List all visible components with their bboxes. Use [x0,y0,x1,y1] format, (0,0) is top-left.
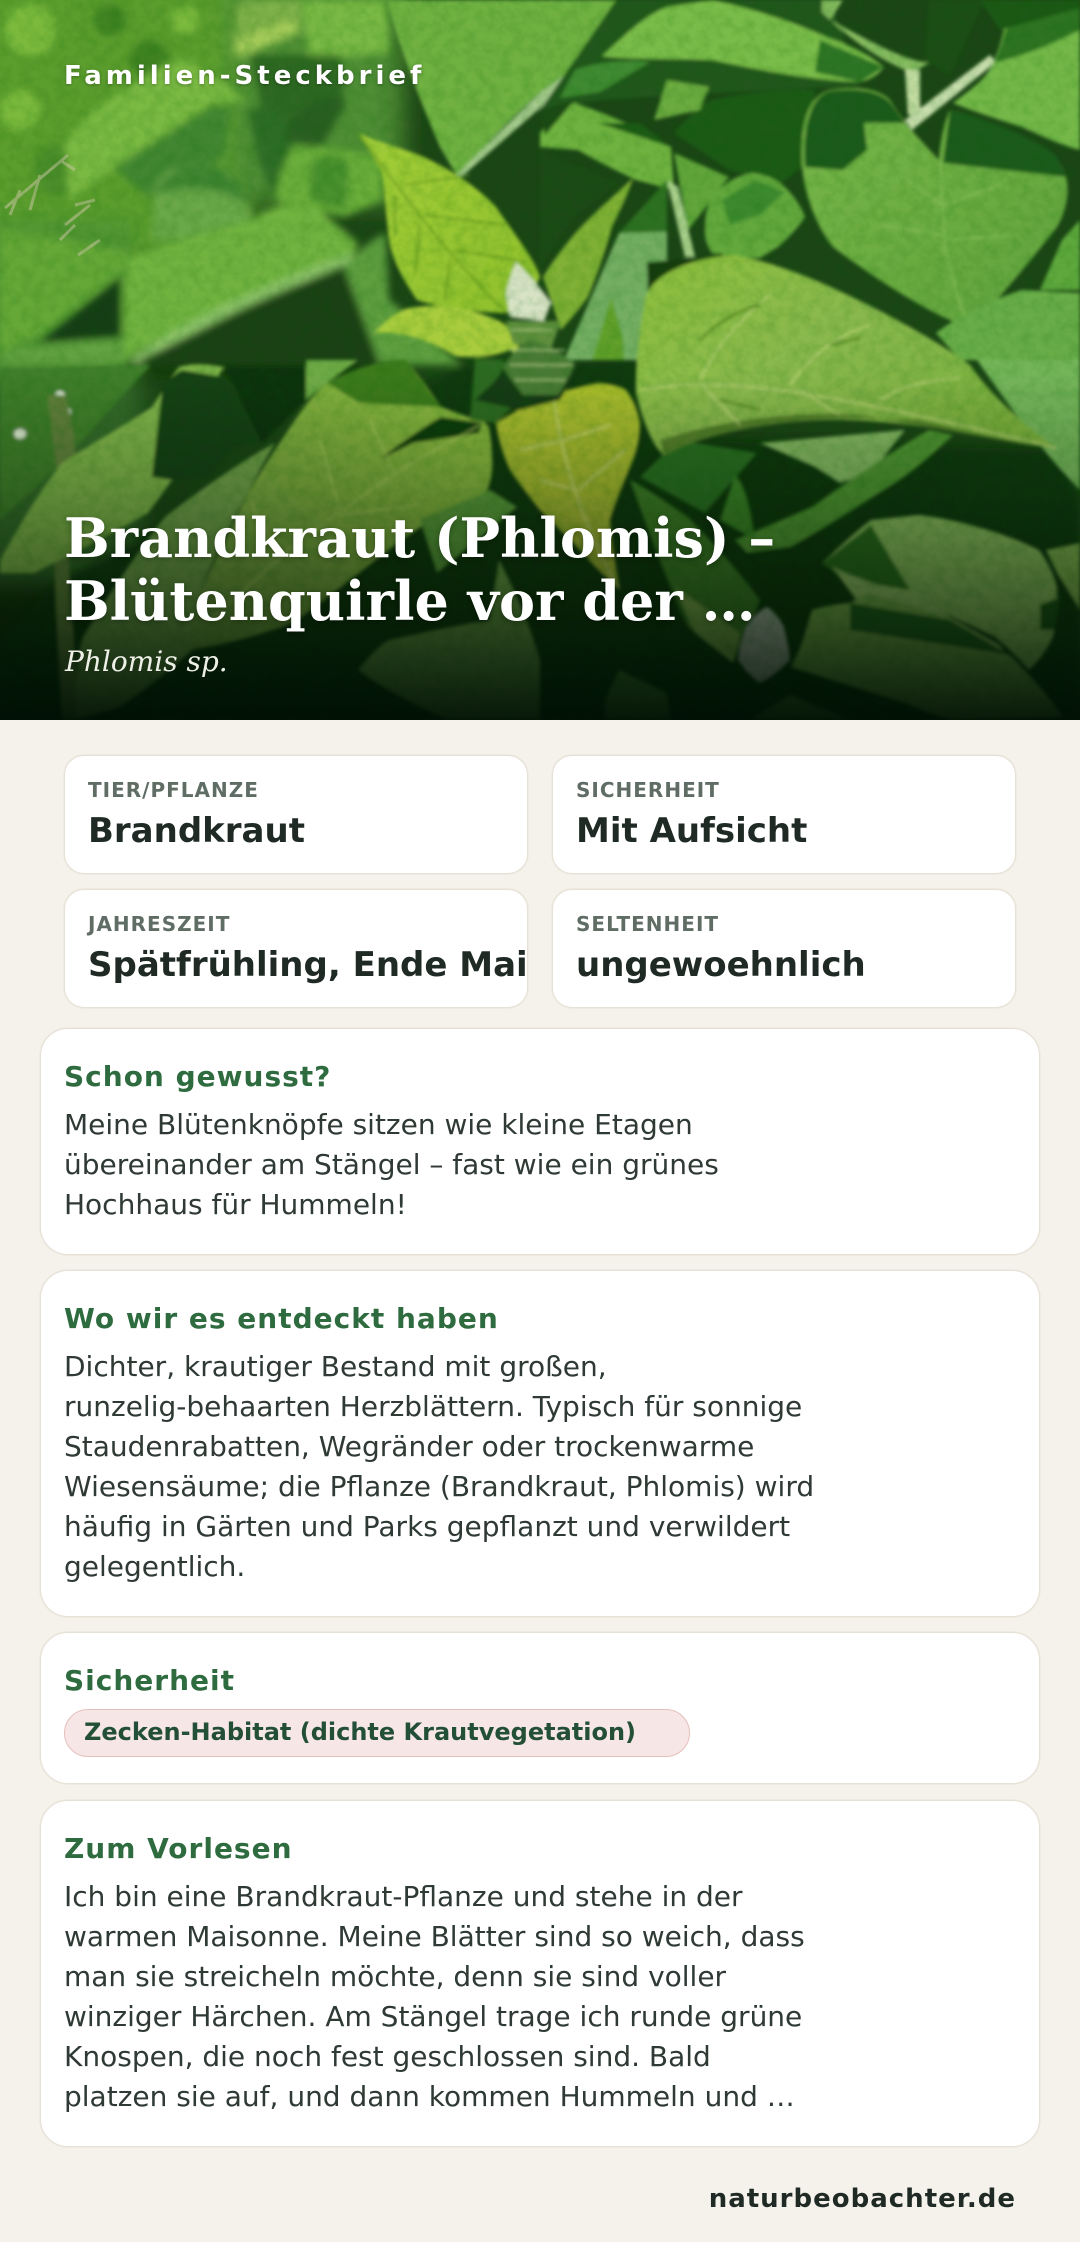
leaves under big right leaf [640,440,757,513]
lower small leaf [374,306,520,358]
top right leaf [953,7,1080,150]
long left lower leaf [630,480,760,663]
panel: Schon gewusst: Hochhaus für Hummeln! [64,1188,407,1221]
panel: Zum Vorlesen: Zum Vorlesen [64,1832,293,1864]
stat card: Seltenheit [552,889,1016,1008]
stat card: Seltenheit: SELTENHEIT [576,912,719,936]
main foliage [0,0,1080,720]
top big leaf [387,0,626,177]
panel: Zum Vorlesen: Ich bin eine Brandkraut-Pflanze und stehe in der [64,1880,743,1913]
scientific name: Phlomis sp. [65,645,228,678]
stat card: Tier/Pflanze: TIER/PFLANZE [88,778,259,802]
left pale lower [0,365,150,520]
panel: Schon gewusst: Schon gewusst? [64,1060,331,1092]
panel: Zum Vorlesen: warmen Maisonne. Meine Blätter sind so weich, dass [64,1920,805,1953]
panel: Zum Vorlesen: platzen sie auf, und dann kommen Hummeln und … [64,2080,795,2113]
hero photo: phlomis leaves [0,0,1080,718]
heart leaf [802,88,1068,328]
title [64,506,775,633]
panel: Sicherheit: Sicherheit [64,1664,235,1696]
center upper leaf [358,133,540,313]
right mid leaves [1040,220,1080,290]
pale leaf behind bud [564,230,667,360]
title: Brandkraut (Phlomis) – [64,506,775,570]
stat card: Tier/Pflanze: Brandkraut [88,811,305,851]
blurred left leaves [0,0,1080,720]
panel: Wo wir es entdeckt haben: Staudenrabatten, Wegränder oder trockenwarme [64,1430,754,1463]
stat card: Seltenheit: ungewoehnlich [576,945,866,985]
stat card: Sicherheit: Mit Aufsicht [576,811,807,851]
right textured leaf [822,515,1057,670]
warning pill: Zecken-Habitat (dichte Krautvegetation) [84,1718,636,1746]
panel: Wo wir es entdeckt haben: Wiesensäume; die Pflanze (Brandkraut, Phlomis) wird [64,1470,814,1503]
big right leaf [636,255,1057,455]
lower right leaf [791,593,1063,720]
leaf texture noise [0,0,1080,720]
panel: Wo wir es entdeckt haben: runzelig-behaarten Herzblättern. Typisch für sonnige [64,1390,802,1423]
panel: Wo wir es entdeckt haben: häufig in Gärten und Parks gepflanzt und verwildert [64,1510,790,1543]
stat card: Sicherheit: SICHERHEIT [576,778,720,802]
lower center leaf [496,383,640,590]
panel: Wo wir es entdeckt haben: Dichter, krautiger Bestand mit großen, [64,1350,607,1383]
dark top band [540,0,860,110]
footer brand: naturbeobachter.de [709,2184,1016,2214]
stat card: Jahreszeit: Spätfrühling, Ende Mai [88,945,528,985]
panel: Wo wir es entdeckt haben: Wo wir es entdeckt haben [64,1302,499,1334]
grey bud [738,607,790,683]
background foliage [0,0,1080,760]
panel: Schon gewusst [40,1028,1040,1255]
panel: Zum Vorlesen [40,1800,1040,2147]
lower base darks [0,360,1080,720]
hero panel [0,0,1080,720]
upper middle darks [674,89,815,183]
stat card: Tier/Pflanze [64,755,528,874]
centre-left main leaf [189,360,492,650]
round small leaf [705,173,805,258]
panel: Sicherheit [40,1632,1040,1784]
grass seed head [5,155,100,255]
panel: Zum Vorlesen: Knospen, die noch fest geschlossen sind. Bald [64,2040,711,2073]
textured left lower leaf [76,443,275,720]
stat card: Jahreszeit [64,889,528,1008]
panel: Zum Vorlesen: man sie streicheln möchte, denn sie sind voller [64,1960,726,1993]
spike leaves [543,178,633,330]
warning pill [64,1709,690,1757]
lower middle dark-lit leaves [420,490,517,573]
kicker: Familien-Steckbrief [64,61,425,91]
panel: Zum Vorlesen: winziger Härchen. Am Stängel trage ich runde grüne [64,2000,802,2033]
panel: Schon gewusst: Meine Blütenknöpfe sitzen wie kleine Etagen [64,1108,693,1141]
panel: Wo wir es entdeckt haben: gelegentlich. [64,1550,245,1583]
hero dark gradient overlay [0,0,1080,720]
stat card: Jahreszeit: JAHRESZEIT [88,912,230,936]
stat card: Sicherheit [552,755,1016,874]
title: Blütenquirle vor der … [64,569,756,633]
bud stem shadow [470,358,520,423]
panel: Schon gewusst: übereinander am Stängel – fast wie ein grünes [64,1148,719,1181]
panel: Wo wir es entdeckt haben [40,1270,1040,1617]
flower bud [475,360,580,410]
